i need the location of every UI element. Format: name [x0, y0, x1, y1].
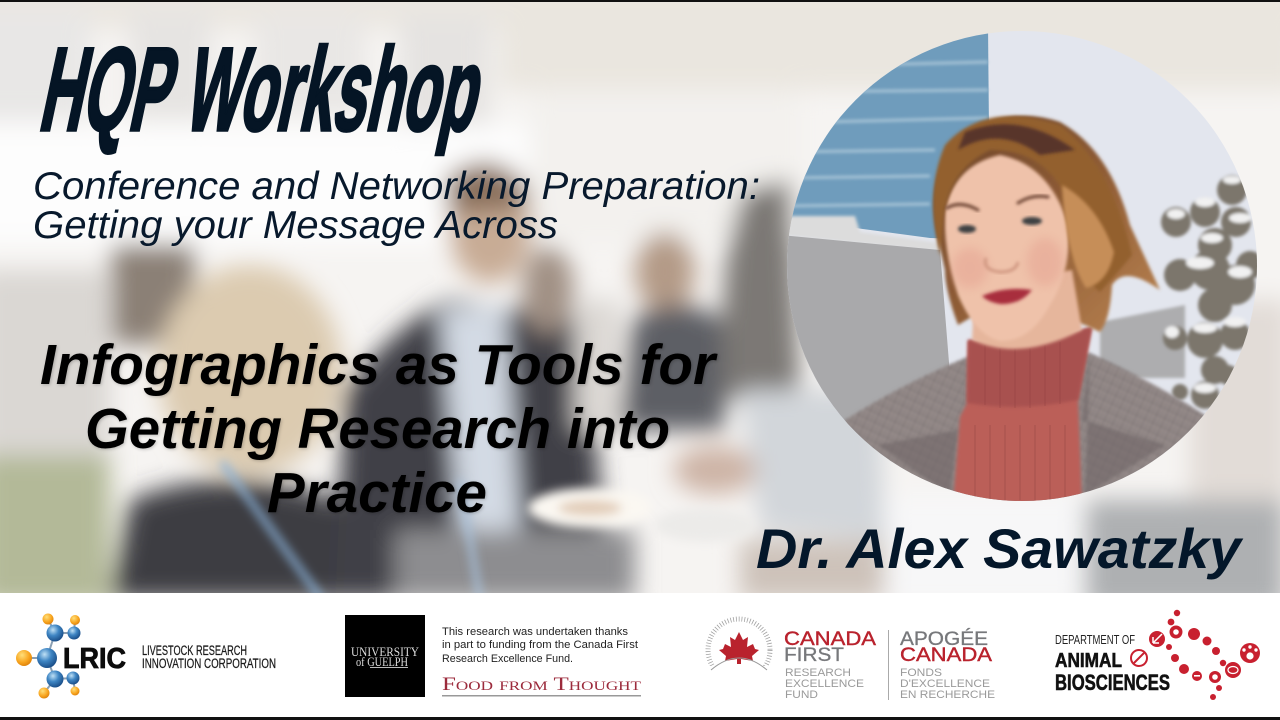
logo: Canada First: D'EXCELLENCE — [900, 678, 990, 690]
talk title: Getting Research into — [85, 397, 670, 460]
logo: Department of Animal Biosciences: BIOSCIENCES — [1055, 670, 1170, 695]
portrait photo — [780, 25, 1270, 520]
face — [945, 155, 1069, 341]
logo: Canada First — [700, 619, 995, 701]
lips — [982, 289, 1032, 304]
leaf ring icon — [1131, 650, 1147, 666]
logo: University of Guelph: of GUELPH — [356, 654, 408, 669]
blazer — [844, 351, 1205, 501]
logo: Department of Animal Biosciences — [1055, 610, 1260, 700]
logo: Canada First: CANADA — [900, 645, 992, 666]
talk title: Practice — [267, 461, 487, 524]
hair back — [934, 116, 1160, 332]
sponsor footer band — [0, 593, 1280, 720]
funding statement — [442, 626, 641, 696]
hair front sweep — [934, 116, 1132, 292]
sky and building backdrop — [780, 25, 1270, 515]
logo: Canada First: APOGÉE — [900, 629, 988, 650]
talk title — [40, 333, 718, 524]
logo: Canada First: FUND — [785, 689, 818, 701]
subtitle: Getting your Message Across — [33, 204, 558, 247]
funding statement: in part to funding from the Canada First — [442, 639, 638, 651]
logo: LRIC — [16, 614, 276, 698]
logo: Canada First: EN RECHERCHE — [900, 689, 995, 701]
logo: Canada First: RESEARCH — [785, 667, 851, 679]
logo: LRIC: LRIC — [63, 643, 126, 675]
logo: Canada First: FIRST — [784, 645, 844, 666]
logo: Canada First: EXCELLENCE — [785, 678, 864, 690]
logo: University of Guelph — [345, 615, 425, 697]
logo: Department of Animal Biosciences: ANIMAL — [1055, 650, 1122, 672]
silver sphere sculpture — [1161, 175, 1264, 409]
logo: LRIC: LIVESTOCK RESEARCH — [142, 643, 247, 658]
subtitle — [33, 165, 760, 247]
icon: maple leaf sunburst — [700, 619, 780, 690]
nose — [985, 258, 1018, 272]
logo: University of Guelph: UNIVERSITY — [351, 644, 420, 659]
funding statement: Research Excellence Fund. — [442, 653, 573, 665]
presenter name: Dr. Alex Sawatzky — [756, 518, 1244, 580]
red turtleneck — [953, 327, 1092, 505]
molecule icon — [16, 614, 80, 698]
logo: Department of Animal Biosciences: DEPARTMENT OF — [1055, 632, 1135, 647]
logo: Canada First: CANADA — [784, 629, 876, 650]
talk title: Infographics as Tools for — [40, 333, 718, 396]
logo: LRIC: INNOVATION CORPORATION — [142, 656, 276, 671]
funding statement: Food from Thought — [442, 674, 641, 695]
top border — [0, 0, 1280, 2]
title: HQP Workshop: HQP Workshop — [31, 25, 496, 156]
logo: Canada First: FONDS — [900, 667, 942, 679]
red dots and icons — [1149, 610, 1260, 700]
subtitle: Conference and Networking Preparation: — [33, 165, 760, 208]
neck — [972, 270, 1082, 349]
funding statement: This research was undertaken thanks — [442, 626, 629, 638]
eyes and brows — [947, 196, 1048, 210]
